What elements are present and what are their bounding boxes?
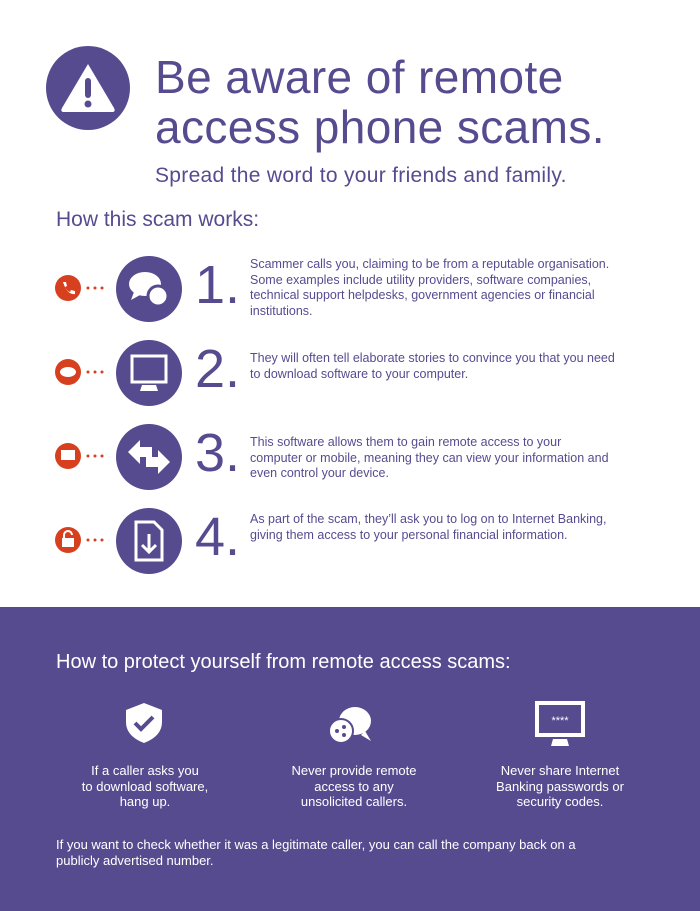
icon: shield [126, 703, 162, 743]
tip 1: If a caller asks you [91, 763, 199, 778]
title: access phone scams. [155, 101, 605, 153]
tip 3: Never share Internet [501, 763, 619, 778]
text 3: This software allows them to gain remote access to your computer or mobile, meaning they can view your information and even control your device. [250, 435, 609, 480]
icon: chat [116, 256, 182, 322]
subtitle: Spread the word to your friends and family. [155, 164, 567, 187]
icon: file download [116, 508, 182, 574]
tip 2: Never provide remote [292, 763, 416, 778]
panel: protect [0, 607, 700, 911]
icon: password monitor: **** [551, 715, 569, 727]
step 2 [55, 339, 615, 406]
step 1 [55, 255, 609, 322]
text 2: They will often tell elaborate stories to convince you that you need to download software to your computer. [250, 351, 615, 380]
number 1: 1. [195, 255, 240, 315]
text 4: As part of the scam, they’ll ask you to log on to Internet Banking, giving them access to your personal financial information. [250, 512, 606, 542]
step 3 [55, 423, 609, 490]
icon: warning [46, 46, 130, 130]
title [155, 51, 605, 153]
footer text: If you want to check whether it was a legitimate caller, you can call the company back on a publicly advertised number. [56, 837, 576, 868]
icon: password monitor [535, 701, 585, 746]
icon: cloud [55, 359, 104, 385]
tip 3: security codes. [517, 794, 603, 809]
icon: phone [55, 275, 104, 301]
icon: small monitor [55, 443, 104, 469]
tip 2: access to any [314, 778, 394, 794]
icon: arrows [116, 424, 182, 490]
number 4: 4. [195, 507, 240, 567]
tip 2: unsolicited callers. [301, 794, 407, 809]
icon: monitor [116, 340, 182, 406]
icon: chat share [330, 707, 371, 742]
text 1: Scammer calls you, claiming to be from a reputable organisation. Some examples include utility providers, software companies, technical support helpdesks, government agencies or financial institutions. [250, 257, 609, 318]
icon: lock [55, 527, 104, 553]
tip 1 [82, 763, 208, 809]
number 2: 2. [195, 339, 240, 399]
tip 2 [292, 763, 416, 809]
tip 1: hang up. [120, 794, 170, 809]
tip 3 [496, 763, 624, 809]
step 4 [55, 507, 606, 574]
title: Be aware of remote [155, 51, 564, 103]
number 3: 3. [195, 423, 240, 483]
heading: protect: How to protect yourself from remote access scams: [56, 651, 511, 673]
heading: how it works: How this scam works: [56, 208, 259, 231]
tip 1: to download software, [82, 778, 208, 794]
tip 3: Banking passwords or [496, 778, 624, 794]
